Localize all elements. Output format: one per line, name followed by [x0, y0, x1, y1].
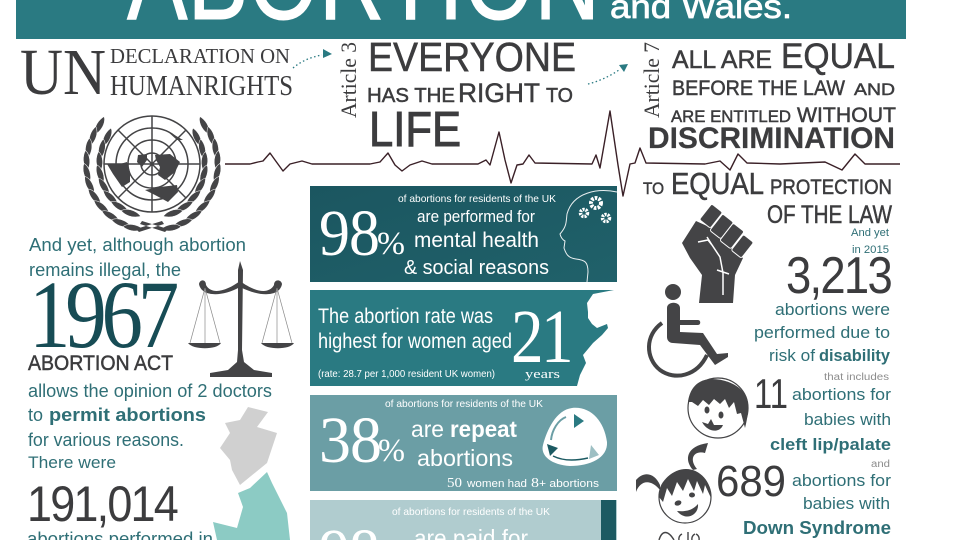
- article 7 text: [643, 37, 896, 229]
- chart: heartbeat line: [225, 111, 900, 196]
- text: and: and: [871, 459, 890, 470]
- article 7 text: WITHOUT: [797, 104, 896, 127]
- text: that includes: that includes: [824, 372, 889, 383]
- panel: repeat abortions: %: [378, 433, 405, 469]
- article 3 text: EVERYONE: [368, 34, 576, 80]
- text block: opinion of 2 doctors: for various reasons.: [28, 430, 184, 450]
- heading: UN declaration on human rights: HUMANRIGHTS: [110, 71, 293, 102]
- text: cleft lip/palate: abortions for: [792, 385, 891, 404]
- heading: UN declaration on human rights: [20, 36, 293, 109]
- article 3 text: HAS THE: [367, 85, 455, 107]
- label: article 7: Article 7: [639, 42, 664, 118]
- panel: mental health: %: [377, 226, 405, 262]
- icon: head with gears: [560, 191, 617, 282]
- article 3 text: RIGHT: [458, 78, 540, 108]
- icon: raised fist: [682, 204, 754, 303]
- panel: highest rate age: 21: [511, 295, 571, 379]
- wreath: [81, 116, 223, 235]
- text: down syndrome: abortions for: [792, 471, 891, 490]
- text block: and yet, although: remains illegal, the: [29, 260, 181, 280]
- article 7 text: DISCRIMINATION: [648, 122, 895, 155]
- panel: paid for: of abortions for residents of the UK: [392, 506, 550, 518]
- number: 689: 689: [716, 457, 786, 506]
- panel: repeat abortions: women had: [466, 478, 527, 490]
- text: performed due to risk of disability: risk of: [769, 346, 815, 365]
- panel: mental health: of abortions for residents of the UK: [398, 193, 556, 205]
- number: 3,213: 3,213: [786, 247, 891, 305]
- panel: highest rate age: The abortion rate was: [318, 305, 493, 328]
- article 7 text: EQUAL: [781, 37, 895, 76]
- panel: highest rate age: years: [525, 366, 560, 381]
- panel: repeat abortions: + abortions: [539, 478, 600, 490]
- year: 1967: 1967: [29, 261, 177, 368]
- panel: mental health: mental health: [414, 229, 539, 252]
- article 7 text: BEFORE THE LAW: [672, 77, 845, 100]
- heading: UN declaration on human rights: UN: [20, 36, 106, 109]
- arrow: to article 3: [293, 49, 332, 68]
- text: down syndrome: [743, 471, 891, 538]
- article 7 text: ARE ENTITLED: [671, 107, 791, 126]
- text block: opinion of 2 doctors: permit abortions: [49, 405, 206, 425]
- article 3 text: TO: [546, 85, 573, 107]
- number: 11: 11: [754, 370, 788, 417]
- number: 191,014: 191,014: [27, 476, 178, 532]
- icon: UN emblem: [81, 116, 223, 235]
- text: cleft lip/palate: babies with: [804, 410, 891, 429]
- text block: and yet, although: [29, 235, 246, 280]
- panel: repeat abortions: repeat: [450, 416, 517, 442]
- panel: repeat abortions: 38: [319, 404, 381, 477]
- text block: and yet, although: And yet, although abortion: [29, 235, 246, 255]
- icon: boy face: [688, 378, 748, 438]
- text: performed due to risk of disability: performed due to: [754, 323, 890, 342]
- article 7 text: AND: [854, 80, 895, 99]
- article 3 text: [367, 34, 576, 157]
- text block: opinion of 2 doctors: allows the opinion of 2 doctors: [28, 381, 272, 401]
- text: performed due to risk of disability: [754, 300, 891, 365]
- panel: repeat abortions: abortions: [417, 445, 513, 471]
- icon: wheelchair: [649, 284, 728, 376]
- text: down syndrome: Down Syndrome: [743, 518, 891, 538]
- label: article 3: Article 3: [336, 42, 361, 118]
- icon: UK map: [213, 407, 290, 540]
- text block: opinion of 2 doctors: to: [28, 405, 43, 425]
- text: and yet in 2015: in 2015: [852, 244, 889, 256]
- panel: repeat abortions: [310, 395, 617, 491]
- text block: opinion of 2 doctors: [28, 381, 272, 472]
- panel: repeat abortions: 50: [447, 476, 462, 491]
- icon: girl face: [636, 443, 711, 523]
- heading: UN declaration on human rights: DECLARATION ON: [110, 44, 290, 68]
- article 3 text: LIFE: [369, 103, 461, 157]
- article 7 text: PROTECTION: [770, 176, 892, 199]
- article 7 text: EQUAL: [671, 166, 764, 201]
- panel: repeat abortions: of abortions for residents of the UK: [385, 398, 543, 410]
- panel: mental health: [310, 186, 617, 282]
- panel: mental health: are performed for: [417, 207, 535, 226]
- text block: opinion of 2 doctors: There were: [28, 453, 116, 472]
- heading: abortion act: ABORTION ACT: [28, 352, 173, 375]
- text: and yet in 2015: And yet: [851, 227, 889, 239]
- article 7 text: OF THE LAW: [767, 201, 892, 229]
- panel: mental health: 98: [319, 197, 379, 270]
- text: down syndrome: babies with: [803, 494, 890, 513]
- text: cleft lip/palate: [770, 385, 891, 454]
- article 7 text: ALL ARE: [672, 46, 772, 74]
- panel: repeat abortions: 8: [531, 476, 539, 491]
- text: performed due to risk of disability: abortions were: [775, 300, 890, 319]
- arrow: to article 7: [588, 64, 628, 84]
- text: and yet in 2015: [851, 227, 889, 256]
- article 7 text: TO: [643, 179, 664, 198]
- icon: scales of justice: [188, 261, 294, 377]
- panel: highest rate age: highest for women aged: [318, 330, 512, 353]
- panel: paid for: [310, 500, 617, 540]
- panel: repeat abortions: are: [411, 416, 444, 442]
- icon: cycle arrows: [543, 408, 607, 466]
- text: performed due to risk of disability: disability: [819, 346, 891, 365]
- title banner: [16, 0, 906, 45]
- panel: highest rate age: (rate: 28.7 per 1,000 resident UK women): [318, 369, 495, 380]
- panel: highest rate age: [310, 290, 614, 386]
- panel: mental health: & social reasons: [404, 257, 549, 279]
- text: cleft lip/palate: cleft lip/palate: [770, 435, 891, 454]
- icon: partial figure at bottom: [659, 532, 699, 540]
